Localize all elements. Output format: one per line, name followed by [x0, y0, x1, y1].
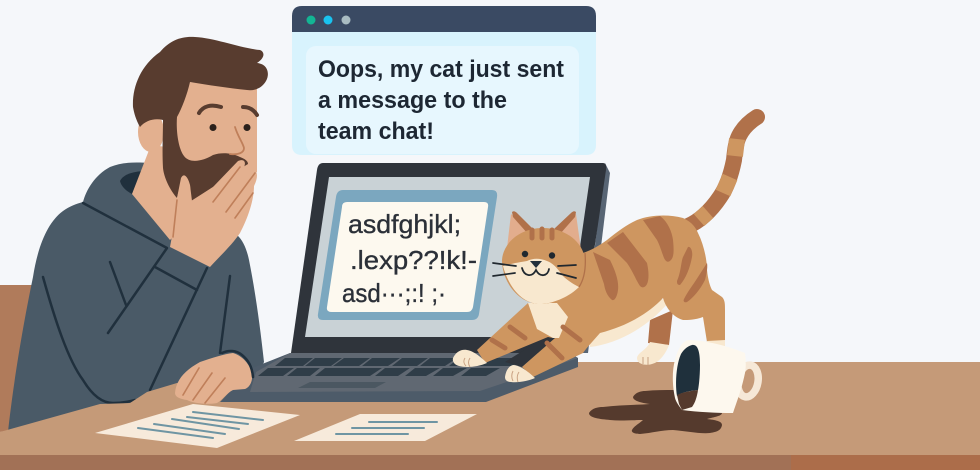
spilled coffee	[589, 389, 722, 434]
paper left	[95, 404, 300, 448]
mug body	[673, 340, 746, 413]
raised hand covering mouth	[170, 160, 257, 267]
man	[8, 37, 268, 432]
typed gibberish	[342, 209, 477, 308]
far hind leg	[637, 310, 673, 365]
chat message text: Oops, my cat just sent	[318, 56, 564, 83]
desk	[0, 362, 980, 470]
screen message panel	[318, 190, 497, 320]
chest	[528, 303, 568, 338]
ear	[138, 112, 164, 152]
paper right	[294, 414, 477, 441]
chat message text: team chat!	[318, 118, 434, 145]
typed gibberish: .lexp??!k!-	[350, 245, 477, 275]
keyboard	[258, 358, 525, 376]
cat	[453, 117, 757, 382]
trackpad	[298, 382, 386, 388]
hood inner	[120, 171, 147, 194]
body	[540, 216, 725, 350]
mug opening	[676, 345, 700, 396]
screen lid	[582, 163, 610, 353]
chat window	[292, 6, 596, 155]
neck	[132, 145, 205, 240]
cat ears	[507, 211, 581, 250]
typed gibberish: asd···;:! ;·	[342, 278, 446, 308]
near hind foot	[707, 340, 725, 346]
screen	[305, 177, 590, 337]
far front leg	[477, 303, 553, 363]
front paws	[453, 350, 535, 382]
chat message text	[318, 56, 564, 145]
leg stripes	[492, 327, 580, 358]
tail	[688, 117, 757, 226]
chat message text: a message to the	[318, 87, 507, 114]
coffee in mug	[677, 390, 698, 410]
cat head	[493, 228, 585, 304]
typed gibberish: asdfghjkl;	[348, 209, 461, 239]
belly	[590, 290, 669, 347]
hoodie seams	[43, 203, 230, 403]
chair back	[0, 285, 32, 432]
laptop	[220, 163, 610, 402]
mug handle	[735, 364, 761, 398]
cat stripes	[593, 216, 707, 302]
coffee mug	[673, 340, 761, 413]
gap between front legs	[505, 337, 555, 367]
window dots	[306, 16, 350, 24]
hair and beard	[133, 37, 268, 201]
man's lower hand	[175, 351, 253, 404]
face	[170, 82, 257, 205]
eyebrows, eyes and nose	[199, 106, 257, 154]
laptop base	[220, 353, 578, 402]
hoodie	[8, 162, 264, 432]
near front leg	[522, 320, 600, 377]
